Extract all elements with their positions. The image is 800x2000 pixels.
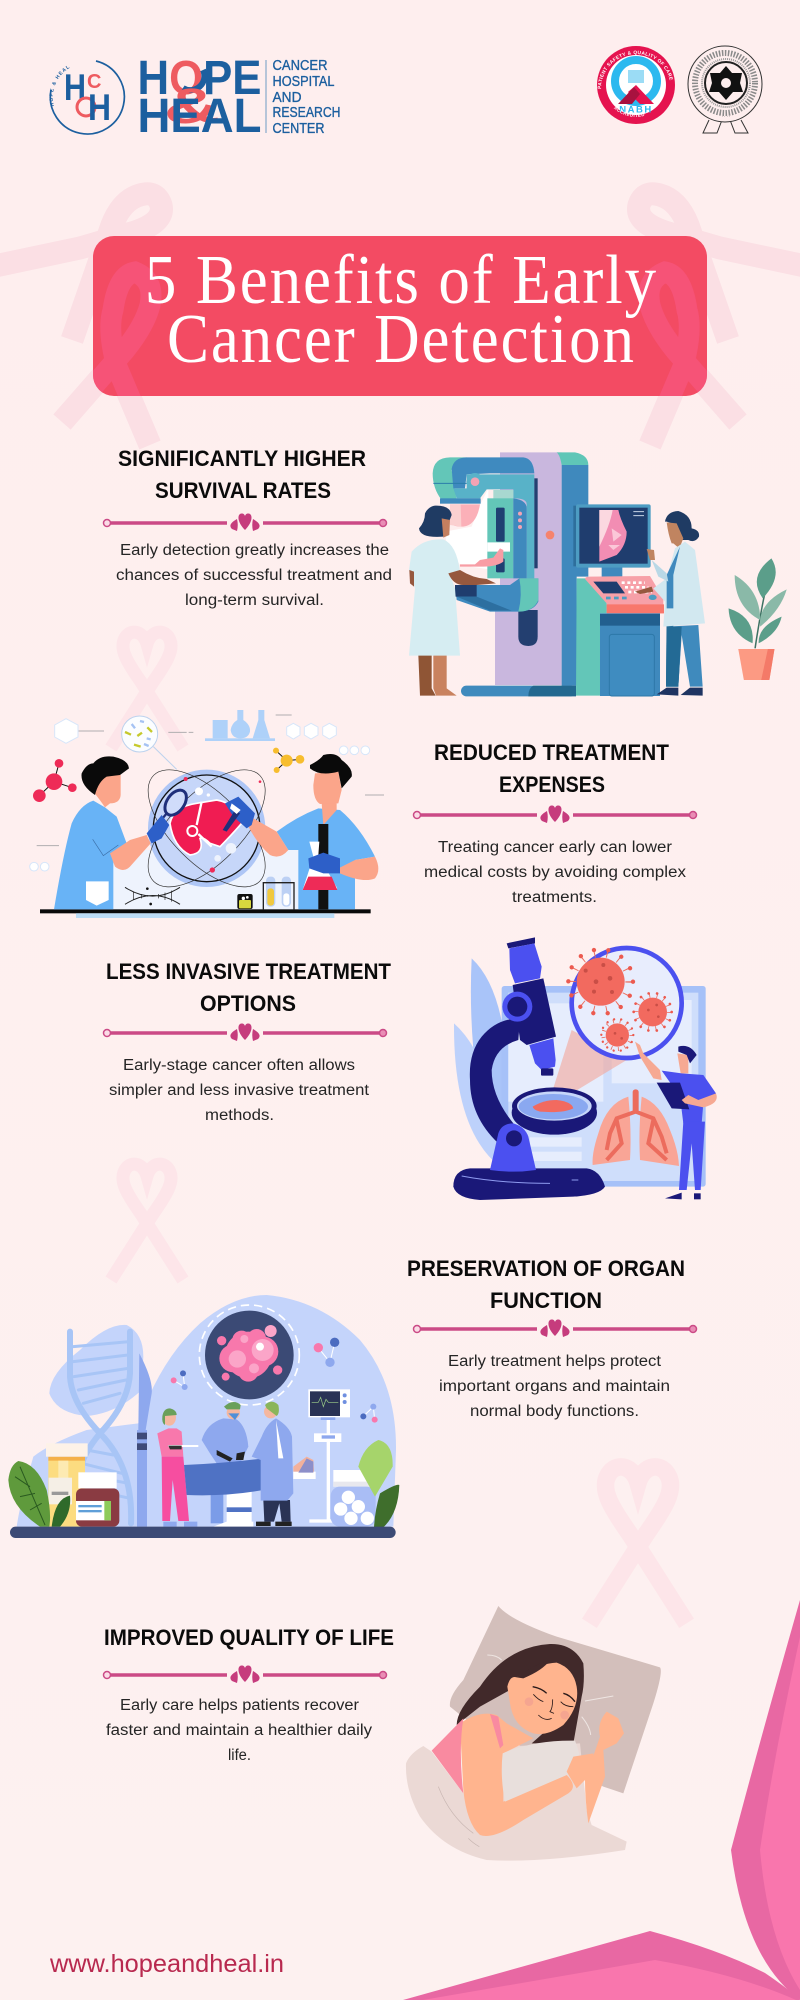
hospital logo: HOPE & HEAL [49,66,70,106]
scalpel [137,1353,152,1527]
title banner [93,236,707,396]
benefit 3 text: simpler and less invasive treatment [109,1082,370,1099]
surgeon [202,1402,248,1463]
illustration: two scientists examining a specimen [30,710,384,918]
NABL seal [688,46,762,133]
doctor [635,511,705,696]
benefit 3 text: OPTIONS [200,991,296,1016]
hospital logo: C [87,71,101,93]
hospital logo: H [64,67,86,108]
left scientist [54,756,169,909]
DNA helix [70,1332,131,1523]
benefit 3 text: Early-stage cancer often allows [123,1057,355,1074]
NABH accreditation badge [597,46,675,124]
small molecules [171,1338,378,1423]
doctor in coat [252,1402,293,1526]
hospital logo: CANCER [272,58,328,74]
benefit 1 text: SURVIVAL RATES [155,478,331,503]
hospital logo: HOPE [138,52,262,105]
benefit 2 text: Treating cancer early can lower [438,839,672,856]
benefit 1 text: SIGNIFICANTLY HIGHER [118,446,366,471]
illustration: microscope with virus and lungs [453,937,717,1200]
NABH accreditation badge: ACCREDITED [614,107,644,117]
monitor [573,504,651,577]
hospital logo: HEAL [138,90,262,143]
illustration: woman sleeping on pillow [406,1606,661,1861]
hospital logo: AND [272,90,302,106]
benefit 4 text: PRESERVATION OF ORGAN [407,1256,685,1281]
specimen globe [129,751,284,906]
benefit 5 text: faster and maintain a healthier daily [106,1722,372,1739]
benefit 5 text [104,1625,394,1764]
hexagons and flasks [30,710,370,871]
patient [409,506,496,696]
microscope [453,937,605,1200]
hospital logo: HOSPITAL [272,74,334,90]
NABL seal: · · · · [722,114,730,119]
small background ribbon, upper [111,632,183,748]
console [576,576,664,696]
magnified virus [568,948,682,1058]
benefit 2 text: treatments. [512,889,597,906]
tumour cell [199,1305,299,1405]
benefit 4 text: Early treatment helps protect [448,1353,662,1370]
benefit 5 text: IMPROVED QUALITY OF LIFE [104,1625,394,1650]
medicine bottles [46,1443,376,1527]
lungs [593,1089,679,1166]
hospital logo: H [88,87,111,128]
hospital logo: CENTER [272,121,324,137]
benefit 4 text [407,1256,696,1420]
illustration: surgical team with DNA and medicine [8,1295,399,1538]
benefit 5 text: life. [228,1747,251,1764]
doctor pointing [635,1042,717,1199]
small background ribbon, middle [111,1164,183,1280]
bench [40,850,371,918]
vital signs monitor [308,1389,350,1523]
surgical drape [184,1458,263,1495]
small background ribbon, right [589,1467,687,1623]
magnifier [160,786,191,822]
benefit 1 text [104,446,392,609]
benefit 1 text: Early detection greatly increases the [120,542,389,559]
leaves [8,1440,399,1527]
benefit 4 text: important organs and maintain [439,1378,670,1395]
benefit 1 text: chances of successful treatment and [116,567,392,584]
molecules [33,748,304,802]
benefit 3 text [104,959,392,1124]
corner decoration, bottom [403,1931,800,2000]
icon: potted plant [729,558,787,680]
hospital logo: & [164,78,220,134]
title banner: Cancer Detection [167,301,634,378]
NABH accreditation badge: PATIENT SAFETY & QUALITY OF CARE [598,50,673,89]
nurse [157,1408,198,1527]
benefit 3 text: methods. [205,1107,274,1124]
DNA and test tubes [125,877,294,909]
benefit 2 text: EXPENSES [499,772,605,797]
hospital logo: RESEARCH [272,105,340,121]
benefit 2 text: medical costs by avoiding complex [424,864,686,881]
background ribbons behind title [0,194,800,445]
title banner: 5 Benefits of Early [145,242,657,319]
hospital logo [49,52,340,143]
benefit 3 text: LESS INVASIVE TREATMENT [106,959,392,984]
benefit 4 text: FUNCTION [490,1288,602,1313]
NABH accreditation badge: NABH [619,104,653,116]
bacteria lens [122,716,177,769]
benefit 4 text: normal body functions. [470,1403,639,1420]
benefit 5 text: Early care helps patients recover [120,1697,359,1714]
benefit 1 text: long-term survival. [185,592,324,609]
right scientist [223,754,378,909]
illustration: mammography machine with patient and doctor [409,452,705,696]
benefit 2 text [414,740,696,906]
corner decoration, right [731,1600,800,2000]
operating table and patient [211,1457,316,1527]
benefit 2 text: REDUCED TREATMENT [434,740,670,765]
website URL: www.hopeandheal.in [49,1950,284,1978]
